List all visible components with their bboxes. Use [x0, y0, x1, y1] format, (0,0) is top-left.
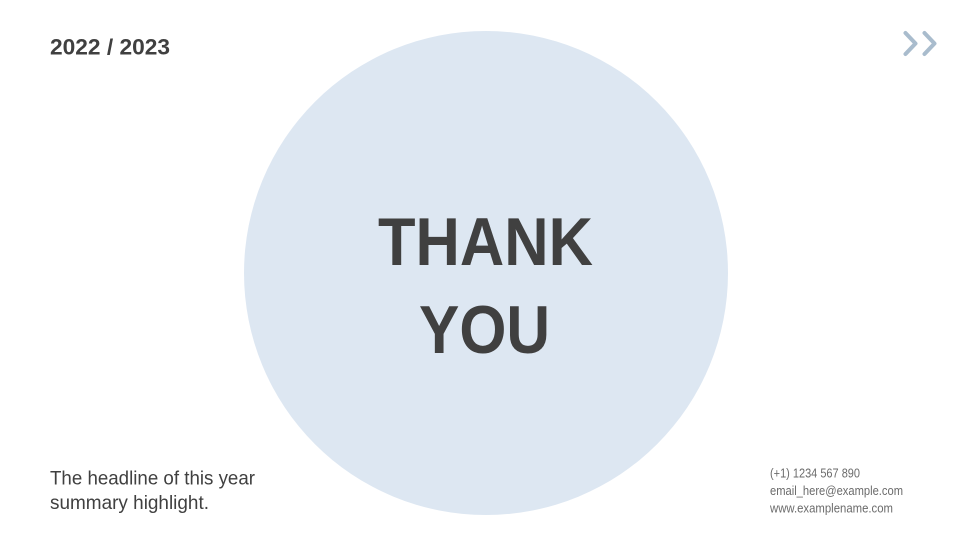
thank you title: THANK — [378, 204, 593, 280]
headline text: summary highlight. — [50, 492, 209, 514]
contact details: www.examplename.com — [769, 501, 893, 515]
contact details: email_here@example.com — [770, 484, 903, 498]
central circle — [244, 31, 728, 515]
contact details: (+1) 1234 567 890 — [770, 466, 860, 480]
thank you title: YOU — [419, 292, 550, 368]
contact details — [769, 466, 903, 515]
year heading: 2022 / 2023 — [50, 34, 170, 60]
icon: double chevron arrow — [906, 33, 934, 54]
headline text — [50, 468, 255, 514]
headline text: The headline of this year — [50, 468, 255, 490]
thank you title — [378, 204, 593, 368]
